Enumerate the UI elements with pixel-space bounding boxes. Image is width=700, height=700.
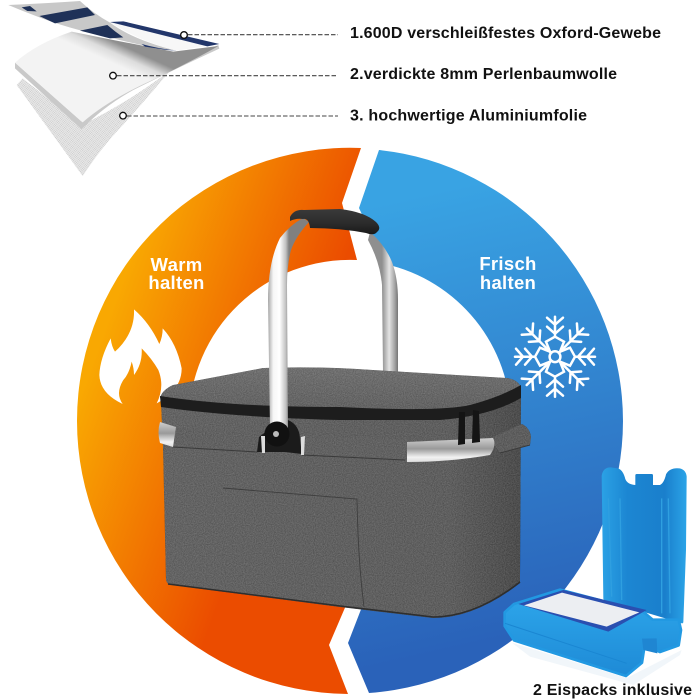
pivot screw [273,431,279,437]
handle grip [290,209,379,234]
cold half ring [348,150,623,693]
left band [173,428,257,452]
lid [160,367,521,412]
flat ice pack [505,590,681,676]
bag body [161,392,521,618]
outer fabric back [8,1,177,51]
heading: warm: halten [148,272,205,293]
ice pack caption: 2 Eispacks inklusive [533,682,692,699]
handle: left tube [268,218,309,428]
pivot housing [257,420,302,454]
outer fabric fold [110,21,219,51]
band shadows [173,445,530,460]
callout dot 2 [110,72,116,79]
upright pack ridges [608,498,670,613]
middle band [302,436,407,460]
right band [490,424,531,453]
heading: fresh: halten [480,272,536,293]
right rail [407,438,494,462]
flat pack label [524,593,639,627]
icon: flame [99,309,182,404]
ice pack shadow [512,643,682,685]
warm half ring [77,148,361,694]
pivot knob [264,422,290,446]
foam edge [15,45,219,129]
label 1: 1.600D verschleißfestes Oxford-Gewebe [350,25,661,42]
pivot clips [261,436,305,455]
leader line 3 [127,115,338,117]
icon: snowflake [515,317,595,397]
heading: fresh: Frisch [479,253,537,274]
callout dot 1 [181,32,187,38]
label 2: 2.verdickte 8mm Perlenbaumwolle [350,66,617,83]
handle: right tube [368,232,398,372]
heading: warm: Warm [151,254,202,275]
bag fabric [160,367,531,618]
navy stripes fold [110,21,219,51]
label 3: 3. hochwertige Aluminiumfolie [350,108,587,124]
bag bottom edge [168,582,520,617]
aluminium foil layer [17,71,170,176]
navy stripes back [22,6,123,38]
cooler bag [158,209,531,618]
callout dot 3 [120,112,126,119]
foam layer [15,32,218,122]
leader line 1 [188,34,338,36]
zipper pull right [472,410,480,443]
left rail [158,422,176,447]
zipper pull left [458,412,465,445]
flat pack ridge [505,623,627,663]
flat pack label border [518,590,647,632]
flat pack cap [642,638,657,653]
layer illustration [8,1,219,176]
leader line 2 [117,75,338,77]
ice packs [505,469,685,685]
pocket seam [223,488,364,607]
zipper [160,385,521,420]
upright ice pack [603,469,685,622]
